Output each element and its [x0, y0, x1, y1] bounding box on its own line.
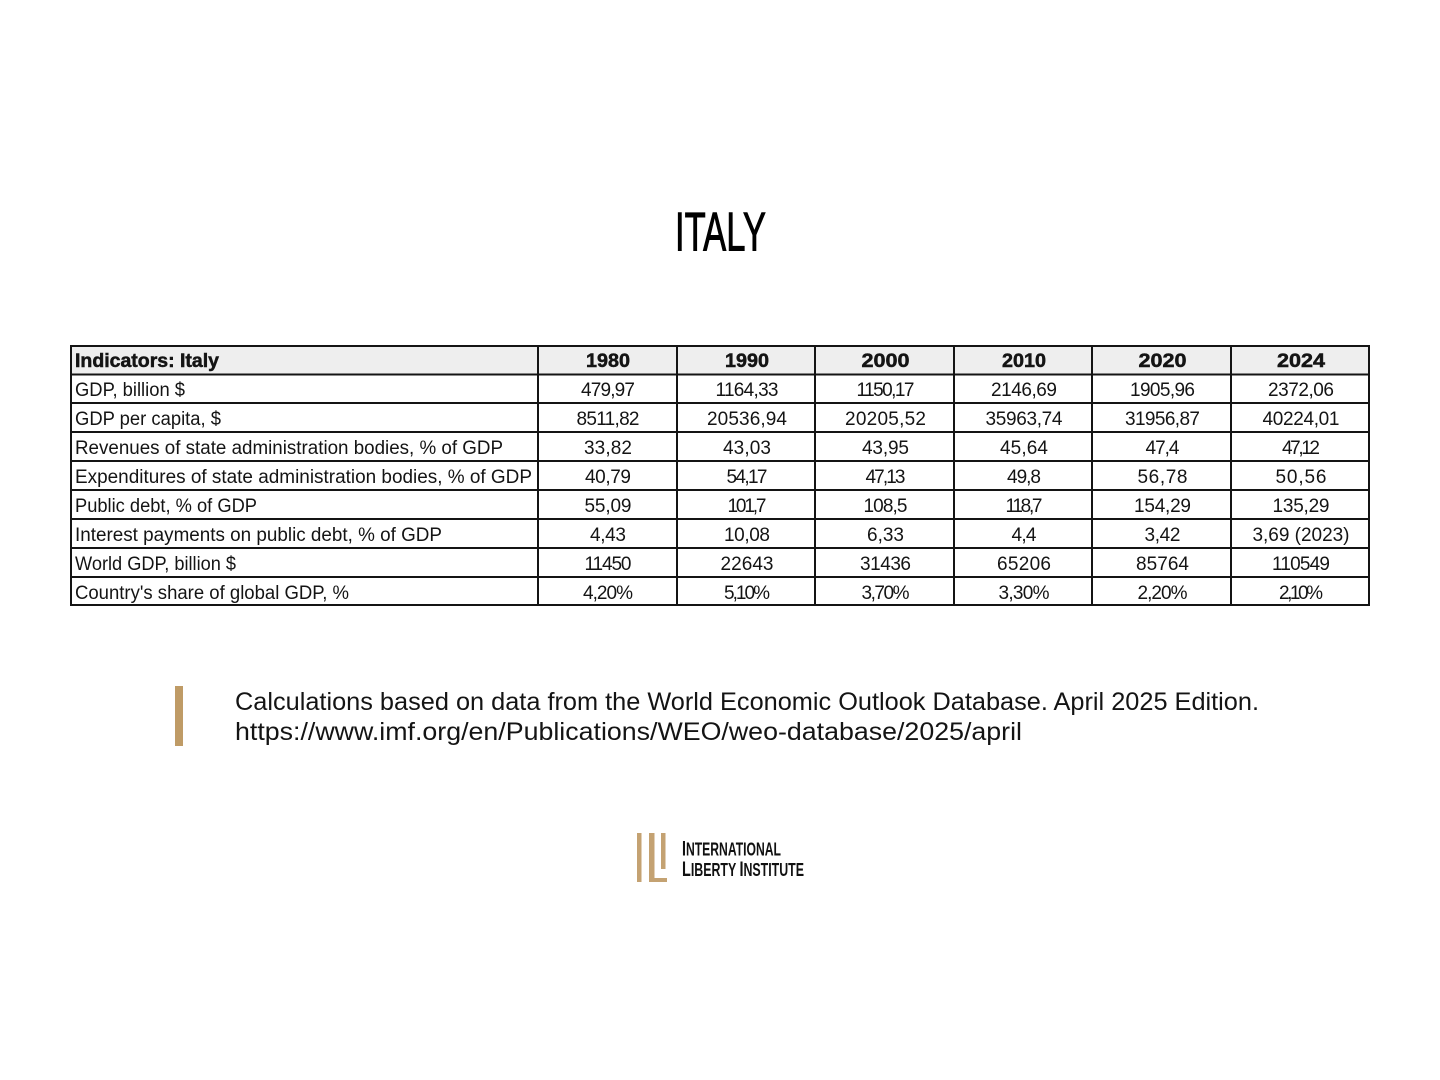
row: interest payments [75, 525, 1350, 546]
row: share of global GDP: 2,10% [1279, 583, 1323, 604]
logo wordmark: INTERNATIONAL [682, 838, 781, 860]
row: public debt: 55,09 [584, 496, 632, 517]
row: world GDP: 31436 [860, 554, 911, 575]
row: GDP: 479,97 [581, 380, 635, 401]
row: public debt: 154,29 [1134, 496, 1191, 517]
row: expenditures [75, 467, 1326, 488]
row: revenues: 43,03 [723, 438, 771, 459]
source note [235, 688, 1259, 746]
header row: 1980 [586, 351, 630, 372]
header row: 2010 [1002, 351, 1046, 372]
row: share of global GDP: 2,20% [1138, 583, 1188, 604]
row: share of global GDP: 3,70% [862, 583, 910, 604]
row: GDP: 1150,17 [856, 380, 914, 401]
row: GDP: GDP, billion $ [75, 380, 185, 401]
source note: Calculations based on data from the World Economic Outlook Database. April 2025 Edition. [235, 688, 1259, 716]
row: interest payments: 4,43 [590, 525, 626, 546]
row: world GDP: 22643 [720, 554, 774, 575]
row: GDP per capita: 20536,94 [707, 409, 787, 430]
row: interest payments: Interest payments on public debt, % of GDP [75, 525, 442, 546]
row: interest payments: 6,33 [867, 525, 904, 546]
row: revenues: Revenues of state administration bodies, % of GDP [75, 438, 503, 459]
row: expenditures: 56,78 [1138, 467, 1188, 488]
row: revenues: 33,82 [584, 438, 632, 459]
row: GDP: 1164,33 [716, 380, 778, 401]
data table [71, 346, 1369, 605]
row: revenues: 43,95 [862, 438, 909, 459]
row: public debt [75, 496, 1330, 517]
row: share of global GDP: 5,10% [724, 583, 770, 604]
title: ITALY [675, 200, 766, 262]
row: revenues: 47,12 [1282, 438, 1320, 459]
table header background [71, 346, 1369, 374]
row: expenditures: 50,56 [1276, 467, 1326, 488]
logo wordmark [682, 838, 804, 881]
row: world GDP: 11450 [584, 554, 632, 575]
header row: 1990 [725, 351, 769, 372]
row: world GDP: 110549 [1272, 554, 1330, 575]
row: interest payments: 3,69 (2023) [1252, 525, 1350, 546]
row: interest payments: 4,4 [1012, 525, 1037, 546]
logo wordmark: LIBERTY INSTITUTE [682, 858, 804, 881]
row: expenditures: 40,79 [585, 467, 631, 488]
row: GDP [75, 380, 1334, 401]
row: GDP per capita: 40224,01 [1262, 409, 1340, 430]
row: public debt: 135,29 [1272, 496, 1330, 517]
row: public debt: 108,5 [864, 496, 908, 517]
row: world GDP: 65206 [997, 554, 1051, 575]
header row: 2000 [862, 351, 910, 372]
row: expenditures: 47,13 [866, 467, 906, 488]
row: revenues: 47,4 [1146, 438, 1180, 459]
row: revenues: 45,64 [1000, 438, 1048, 459]
row: GDP: 2372,06 [1268, 380, 1334, 401]
header row: 2020 [1138, 351, 1186, 372]
row: expenditures: 54,17 [726, 467, 768, 488]
row: GDP per capita: 31956,87 [1125, 409, 1200, 430]
row: share of global GDP: 3,30% [998, 583, 1050, 604]
row: GDP per capita [75, 409, 1340, 430]
row: world GDP: 85764 [1136, 554, 1189, 575]
logo: International Liberty Institute [637, 833, 804, 882]
row: world GDP [75, 554, 1330, 575]
row: share of global GDP: 4,20% [583, 583, 633, 604]
header row: Indicators: Italy [75, 351, 219, 372]
row: revenues [75, 438, 1320, 459]
row: share of global GDP [75, 583, 1323, 604]
logo mark [637, 833, 667, 882]
row: GDP per capita: 20205,52 [845, 409, 926, 430]
row: public debt: 118,7 [1006, 496, 1042, 517]
row: GDP: 2146,69 [991, 380, 1057, 401]
row: GDP per capita: 35963,74 [986, 409, 1063, 430]
row: world GDP: World GDP, billion $ [75, 554, 236, 575]
row: interest payments: 10,08 [724, 525, 770, 546]
row: GDP per capita: GDP per capita, $ [75, 409, 221, 430]
row: expenditures: 49,8 [1007, 467, 1041, 488]
accent bar [175, 686, 183, 746]
row: public debt: Public debt, % of GDP [75, 496, 257, 517]
source note: https://www.imf.org/en/Publications/WEO/weo-database/2025/april [235, 718, 1022, 746]
row: GDP: 1905,96 [1130, 380, 1195, 401]
row: public debt: 101,7 [728, 496, 766, 517]
header row: 2024 [1277, 351, 1325, 372]
row: GDP per capita: 8511,82 [576, 409, 640, 430]
row: share of global GDP: Country's share of global GDP, % [75, 583, 349, 604]
table grid [71, 346, 1369, 605]
row: interest payments: 3,42 [1144, 525, 1180, 546]
row: expenditures: Expenditures of state administration bodies, % of GDP [75, 467, 532, 488]
header row [75, 351, 1325, 372]
